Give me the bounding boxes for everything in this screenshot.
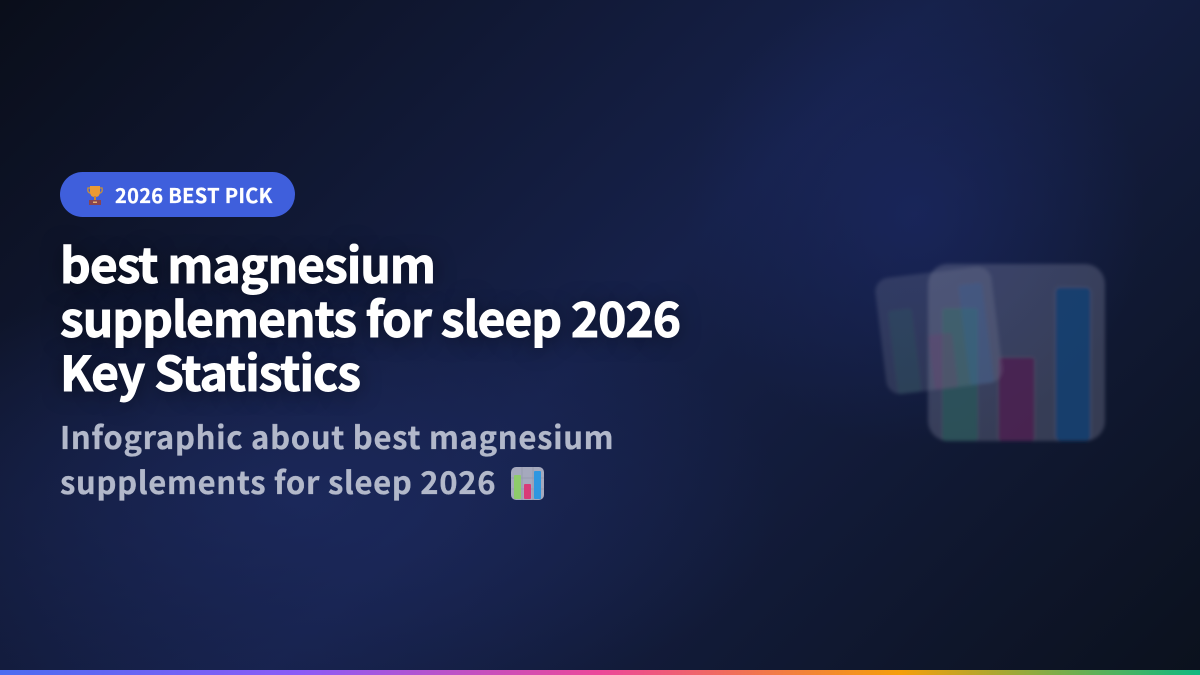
icon: large blurred bar chart [874,262,1106,443]
icon: trophy [87,186,103,205]
badge text: 2026 BEST PICK [115,180,273,209]
subtitle [60,412,614,503]
title [60,227,680,405]
subtitle: supplements for sleep 2026 [60,458,496,503]
badge: 2026 best pick [60,172,295,217]
main chart tile [928,264,1105,441]
title: Key Statistics [60,335,360,405]
icon: small bar chart emoji [511,467,544,500]
title: best magnesium [60,227,435,297]
tilted chart tile [874,265,1004,396]
rainbow accent bar [0,670,1200,675]
subtitle: Infographic about best magnesium [60,412,614,458]
title: supplements for sleep 2026 [60,281,680,351]
